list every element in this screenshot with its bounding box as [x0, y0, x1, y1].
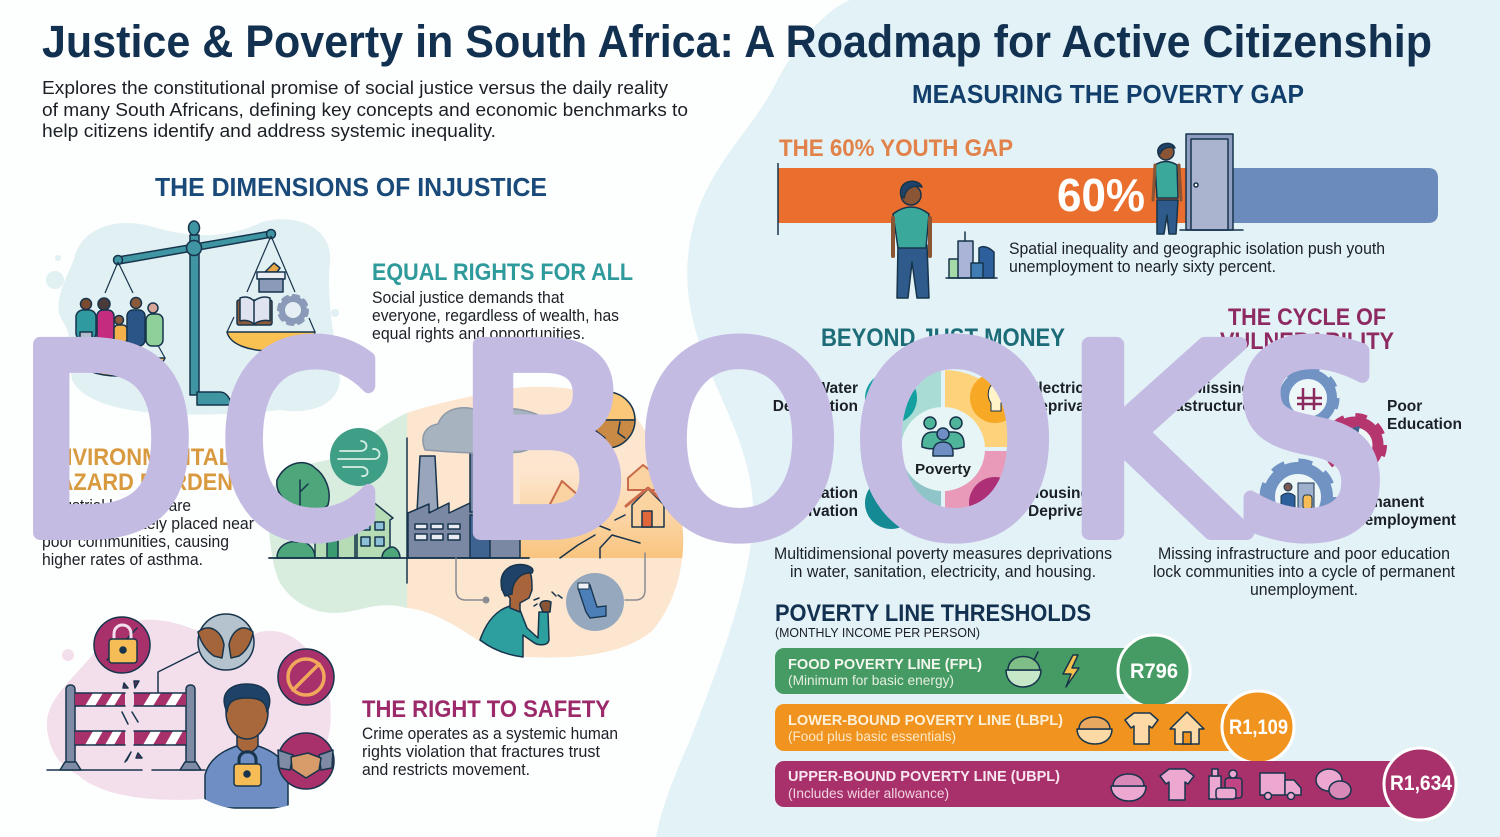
bar: food poverty line [775, 635, 1190, 707]
deprivation labels: Sanitation [783, 485, 858, 502]
text block: equal rights for all: everyone, regardless of wealth, has [372, 307, 619, 325]
caption [1153, 545, 1455, 599]
caption: Missing infrastructure and poor education [1158, 545, 1450, 563]
text block: environmental hazard burden: disproportionately placed near [42, 515, 254, 533]
watermark: DC BOOKS: D [17, 293, 196, 593]
heading: THE CYCLE OF [1228, 304, 1386, 331]
deprivation labels: Deprivation [1028, 503, 1113, 520]
text block: environmental hazard burden: ENVIRONMENTAL [42, 444, 232, 471]
watermark: DC BOOKS: C [219, 293, 381, 593]
caption [1009, 240, 1385, 276]
heading: measuring the poverty gap: MEASURING THE POVERTY GAP [912, 79, 1304, 109]
text block: the right to safety: THE RIGHT TO SAFETY [362, 696, 610, 723]
text block: the right to safety: rights violation that fractures trust [362, 743, 600, 761]
caption: unemployment to nearly sixty percent. [1009, 258, 1276, 276]
bar: upper-bound poverty line: (Includes wider allowance) [788, 785, 949, 801]
padlock [234, 752, 261, 786]
heading: the dimensions of injustice: THE DIMENSIONS OF INJUSTICE [155, 172, 547, 202]
heading [1220, 304, 1394, 355]
heading: POVERTY LINE THRESHOLDS [775, 600, 1091, 627]
deprivation labels: Deprivation [1028, 398, 1113, 415]
cycle labels: Infrastructure [1150, 398, 1251, 415]
broken barrier [47, 652, 205, 770]
text block: environmental hazard burden: higher rates of asthma. [42, 551, 203, 569]
caption: lock communities into a cycle of permanent [1153, 563, 1455, 581]
text block: the right to safety [362, 696, 618, 779]
scale pole and beam [114, 221, 276, 405]
icon: people [922, 417, 964, 456]
trees and green house [277, 463, 400, 558]
houses [547, 465, 668, 558]
icon circle: handshake [278, 733, 334, 789]
illustration: scales of justice [46, 219, 340, 415]
label: Poverty [915, 461, 972, 478]
coughing man [480, 565, 562, 657]
text block: equal rights for all: equal rights and opportunities. [372, 325, 585, 343]
caption: Spatial inequality and geographic isolation push youth [1009, 240, 1385, 258]
person with padlock [205, 684, 288, 808]
text block: equal rights for all [372, 259, 633, 343]
caption: unemployment. [1250, 581, 1358, 599]
illustration: environmental hazard [269, 387, 690, 658]
panel: beyond just money [773, 324, 1113, 581]
icon circle: broken lock [94, 617, 150, 673]
bar: food poverty line: (Minimum for basic energy) [788, 672, 954, 688]
bar: lower-bound poverty line [775, 691, 1294, 763]
gap bar [778, 163, 1438, 235]
bar: lower-bound poverty line: (Food plus basic essentials) [788, 728, 956, 744]
gears [1262, 369, 1384, 533]
donut chart: poverty dimensions [864, 370, 1022, 529]
title: Justice & Poverty in South Africa: A Roadmap for Active Citizenship [42, 16, 1432, 67]
text block: equal rights for all: EQUAL RIGHTS FOR ALL [372, 259, 633, 286]
watermark: DC BOOKS: K [1063, 294, 1249, 594]
cracked earth [579, 392, 635, 448]
text block: environmental hazard burden [42, 444, 254, 569]
cycle labels: Missing [1193, 380, 1251, 397]
deprivation labels: Electricity [1028, 380, 1102, 397]
icon: inhaler [566, 573, 624, 631]
icon circle: broken trust hands [198, 614, 254, 670]
deprivation labels: Deprivation [773, 503, 858, 520]
deprivation labels: Deprivation [773, 398, 858, 415]
deprivation labels: Housing [1028, 485, 1090, 502]
intro text [42, 77, 688, 141]
icon: wind [330, 428, 388, 486]
ground lines and brackets [269, 438, 645, 604]
watermark: DC BOOKS: O [638, 294, 841, 594]
caption [774, 545, 1112, 581]
panel: the 60% youth gap [778, 134, 1438, 298]
icon: city [946, 232, 997, 278]
intro text: of many South Africans, defining key concepts and economic benchmarks to [42, 99, 688, 120]
intro text: Explores the constitutional promise of social justice versus the daily reality [42, 77, 669, 98]
watermark: DC BOOKS: S [1234, 293, 1386, 594]
text block: equal rights for all: Social justice demands that [372, 289, 564, 307]
text block: environmental hazard burden: HAZARD BURDEN [42, 469, 233, 496]
illustration: the right to safety [47, 614, 334, 808]
bar: lower-bound poverty line: R1,109 [1229, 716, 1288, 739]
cycle labels: Unemployment [1344, 512, 1456, 529]
cycle labels [1150, 380, 1462, 529]
bar: lower-bound poverty line: LOWER-BOUND POVERTY LINE (LBPL) [788, 712, 1063, 729]
bar: upper-bound poverty line: R1,634 [1390, 772, 1452, 795]
large figure [893, 181, 930, 298]
heading: VULNERABILITY [1220, 328, 1394, 355]
deprivation labels [773, 380, 1113, 520]
cycle labels: Education [1387, 416, 1462, 433]
icon circle: prohibition [278, 649, 334, 705]
heading: BEYOND JUST MONEY [821, 324, 1065, 352]
bar: upper-bound poverty line [775, 748, 1456, 820]
deprivation labels: Water [816, 380, 858, 397]
text block: environmental hazard burden: Industrial hazards are [42, 497, 191, 515]
background blob: right panel [656, 0, 1500, 837]
text block: environmental hazard burden: poor communities, causing [42, 533, 229, 551]
cycle labels: Poor [1387, 398, 1422, 415]
small figure at door [1153, 143, 1181, 234]
value: 60%: 60% [1057, 169, 1145, 221]
watermark: DC BOOKS [17, 293, 1386, 594]
watermark: DC BOOKS: B [455, 294, 632, 594]
watermark: DC BOOKS: O [853, 294, 1056, 594]
cycle labels: Permanent [1344, 494, 1424, 511]
caption: Multidimensional poverty measures deprivations [774, 545, 1112, 563]
bar: upper-bound poverty line: UPPER-BOUND POVERTY LINE (UBPL) [788, 768, 1060, 785]
text block: the right to safety: and restricts movement. [362, 761, 530, 779]
bar: food poverty line: FOOD POVERTY LINE (FPL) [788, 656, 982, 673]
panel: poverty line thresholds [775, 600, 1456, 820]
icon: door [1180, 134, 1243, 230]
right pan: ballot, book and gear [227, 236, 315, 351]
panel: the cycle of vulnerability [1150, 304, 1462, 599]
bar: food poverty line: R796 [1130, 660, 1178, 683]
subheading: THE 60% YOUTH GAP [779, 135, 1013, 162]
subheading: (MONTHLY INCOME PER PERSON) [775, 625, 980, 640]
text block: the right to safety: Crime operates as a systemic human [362, 725, 618, 743]
caption: in water, sanitation, electricity, and housing. [790, 563, 1096, 581]
intro text: help citizens identify and address systemic inequality. [42, 120, 496, 141]
factory [408, 408, 547, 558]
left pan: families [75, 262, 165, 376]
